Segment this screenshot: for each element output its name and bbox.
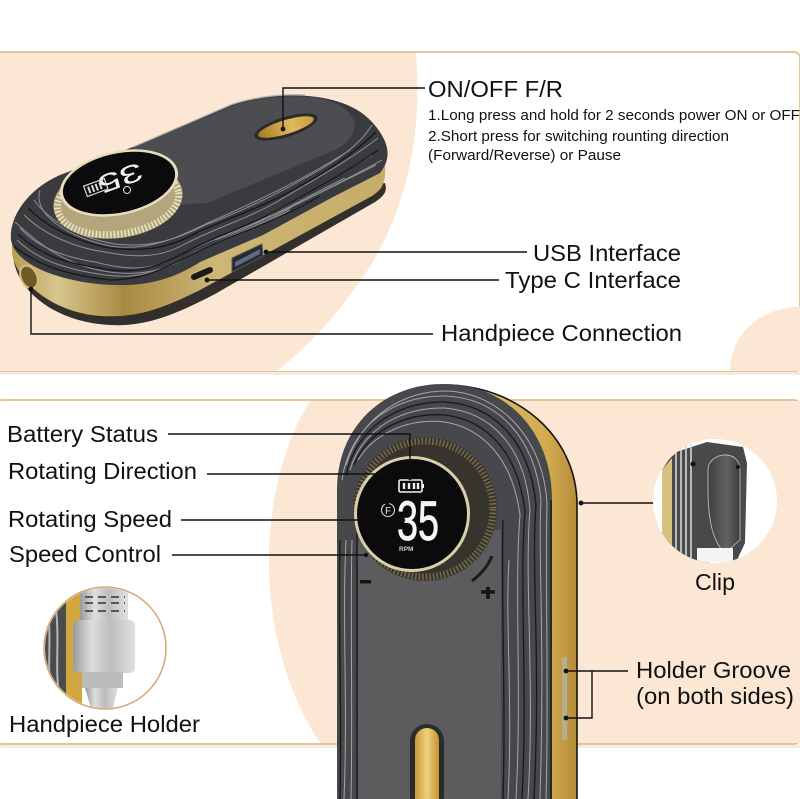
leader: handpiece connection bbox=[29, 287, 433, 334]
wave texture bbox=[342, 391, 547, 799]
panel: bottom feature panel bbox=[0, 400, 800, 748]
inset: handpiece holder bbox=[44, 585, 166, 712]
label: Holder Groove: Holder Groove bbox=[636, 657, 791, 683]
battery icon bbox=[84, 179, 108, 196]
leader: USB bbox=[264, 250, 527, 254]
textured body bbox=[337, 384, 552, 799]
label: Clip: Clip bbox=[695, 569, 735, 595]
leader: Type C bbox=[205, 278, 499, 282]
heading: ON/OFF F/R: ON/OFF F/R bbox=[428, 76, 563, 102]
center plate bbox=[358, 530, 501, 799]
text block: on/off instructions: 2.Short press for switching rounting direction bbox=[428, 128, 729, 145]
label: on both sides: (on both sides) bbox=[636, 683, 794, 709]
knob bbox=[48, 153, 188, 247]
speed digits: 35 bbox=[397, 489, 439, 552]
gold side band bbox=[12, 160, 385, 316]
device: top view of controller bbox=[11, 95, 388, 325]
label: USB Interface: USB Interface bbox=[533, 240, 681, 266]
textured top surface bbox=[11, 95, 388, 285]
label: Battery Status: Battery Status bbox=[7, 421, 158, 447]
leader: rotating speed bbox=[181, 518, 405, 522]
lower gold button bbox=[410, 724, 444, 799]
inset: clip bbox=[653, 439, 777, 563]
plus symbol bbox=[481, 587, 495, 599]
leader: rotating direction bbox=[207, 474, 389, 505]
direction icon: F bbox=[385, 506, 391, 517]
inner plate bbox=[133, 96, 355, 205]
leader: speed control bbox=[172, 553, 368, 557]
base shadow bbox=[12, 183, 386, 325]
gold side bbox=[430, 385, 577, 799]
speed arc bbox=[472, 556, 492, 581]
panel: top feature panel bbox=[0, 52, 800, 375]
wave texture bbox=[15, 125, 382, 276]
text block: on/off instructions bbox=[428, 107, 800, 164]
screen digits: 35 bbox=[94, 157, 147, 200]
text block: on/off instructions: 1.Long press and hold for 2 seconds power ON or OFF bbox=[428, 107, 800, 124]
battery icon bbox=[399, 480, 424, 492]
direction icon bbox=[382, 504, 394, 517]
label: Speed Control: Speed Control bbox=[9, 541, 161, 567]
lcd screen bbox=[357, 459, 467, 569]
label: Handpiece Connection: Handpiece Connection bbox=[441, 320, 682, 346]
label: Type C Interface: Type C Interface bbox=[505, 267, 681, 293]
text block: on/off instructions: (Forward/Reverse) or Pause bbox=[428, 147, 621, 164]
on/off button bbox=[252, 108, 320, 146]
leader: battery status bbox=[168, 434, 412, 480]
knob ring bbox=[353, 437, 497, 581]
handpiece jack bbox=[17, 263, 41, 291]
leader: holder groove bbox=[564, 669, 628, 720]
USB port bbox=[232, 244, 263, 272]
label: Handpiece Holder: Handpiece Holder bbox=[9, 711, 200, 737]
leader: on/off bbox=[281, 88, 425, 131]
leader: clip bbox=[579, 501, 654, 505]
label: Rotating Speed: Rotating Speed bbox=[8, 506, 172, 532]
minus symbol bbox=[360, 580, 371, 584]
Type C port bbox=[194, 270, 210, 277]
label: Rotating Direction: Rotating Direction bbox=[8, 458, 197, 484]
device: front view of controller bbox=[337, 384, 577, 799]
rpm label: RPM bbox=[399, 546, 413, 553]
holder groove bbox=[562, 657, 567, 740]
